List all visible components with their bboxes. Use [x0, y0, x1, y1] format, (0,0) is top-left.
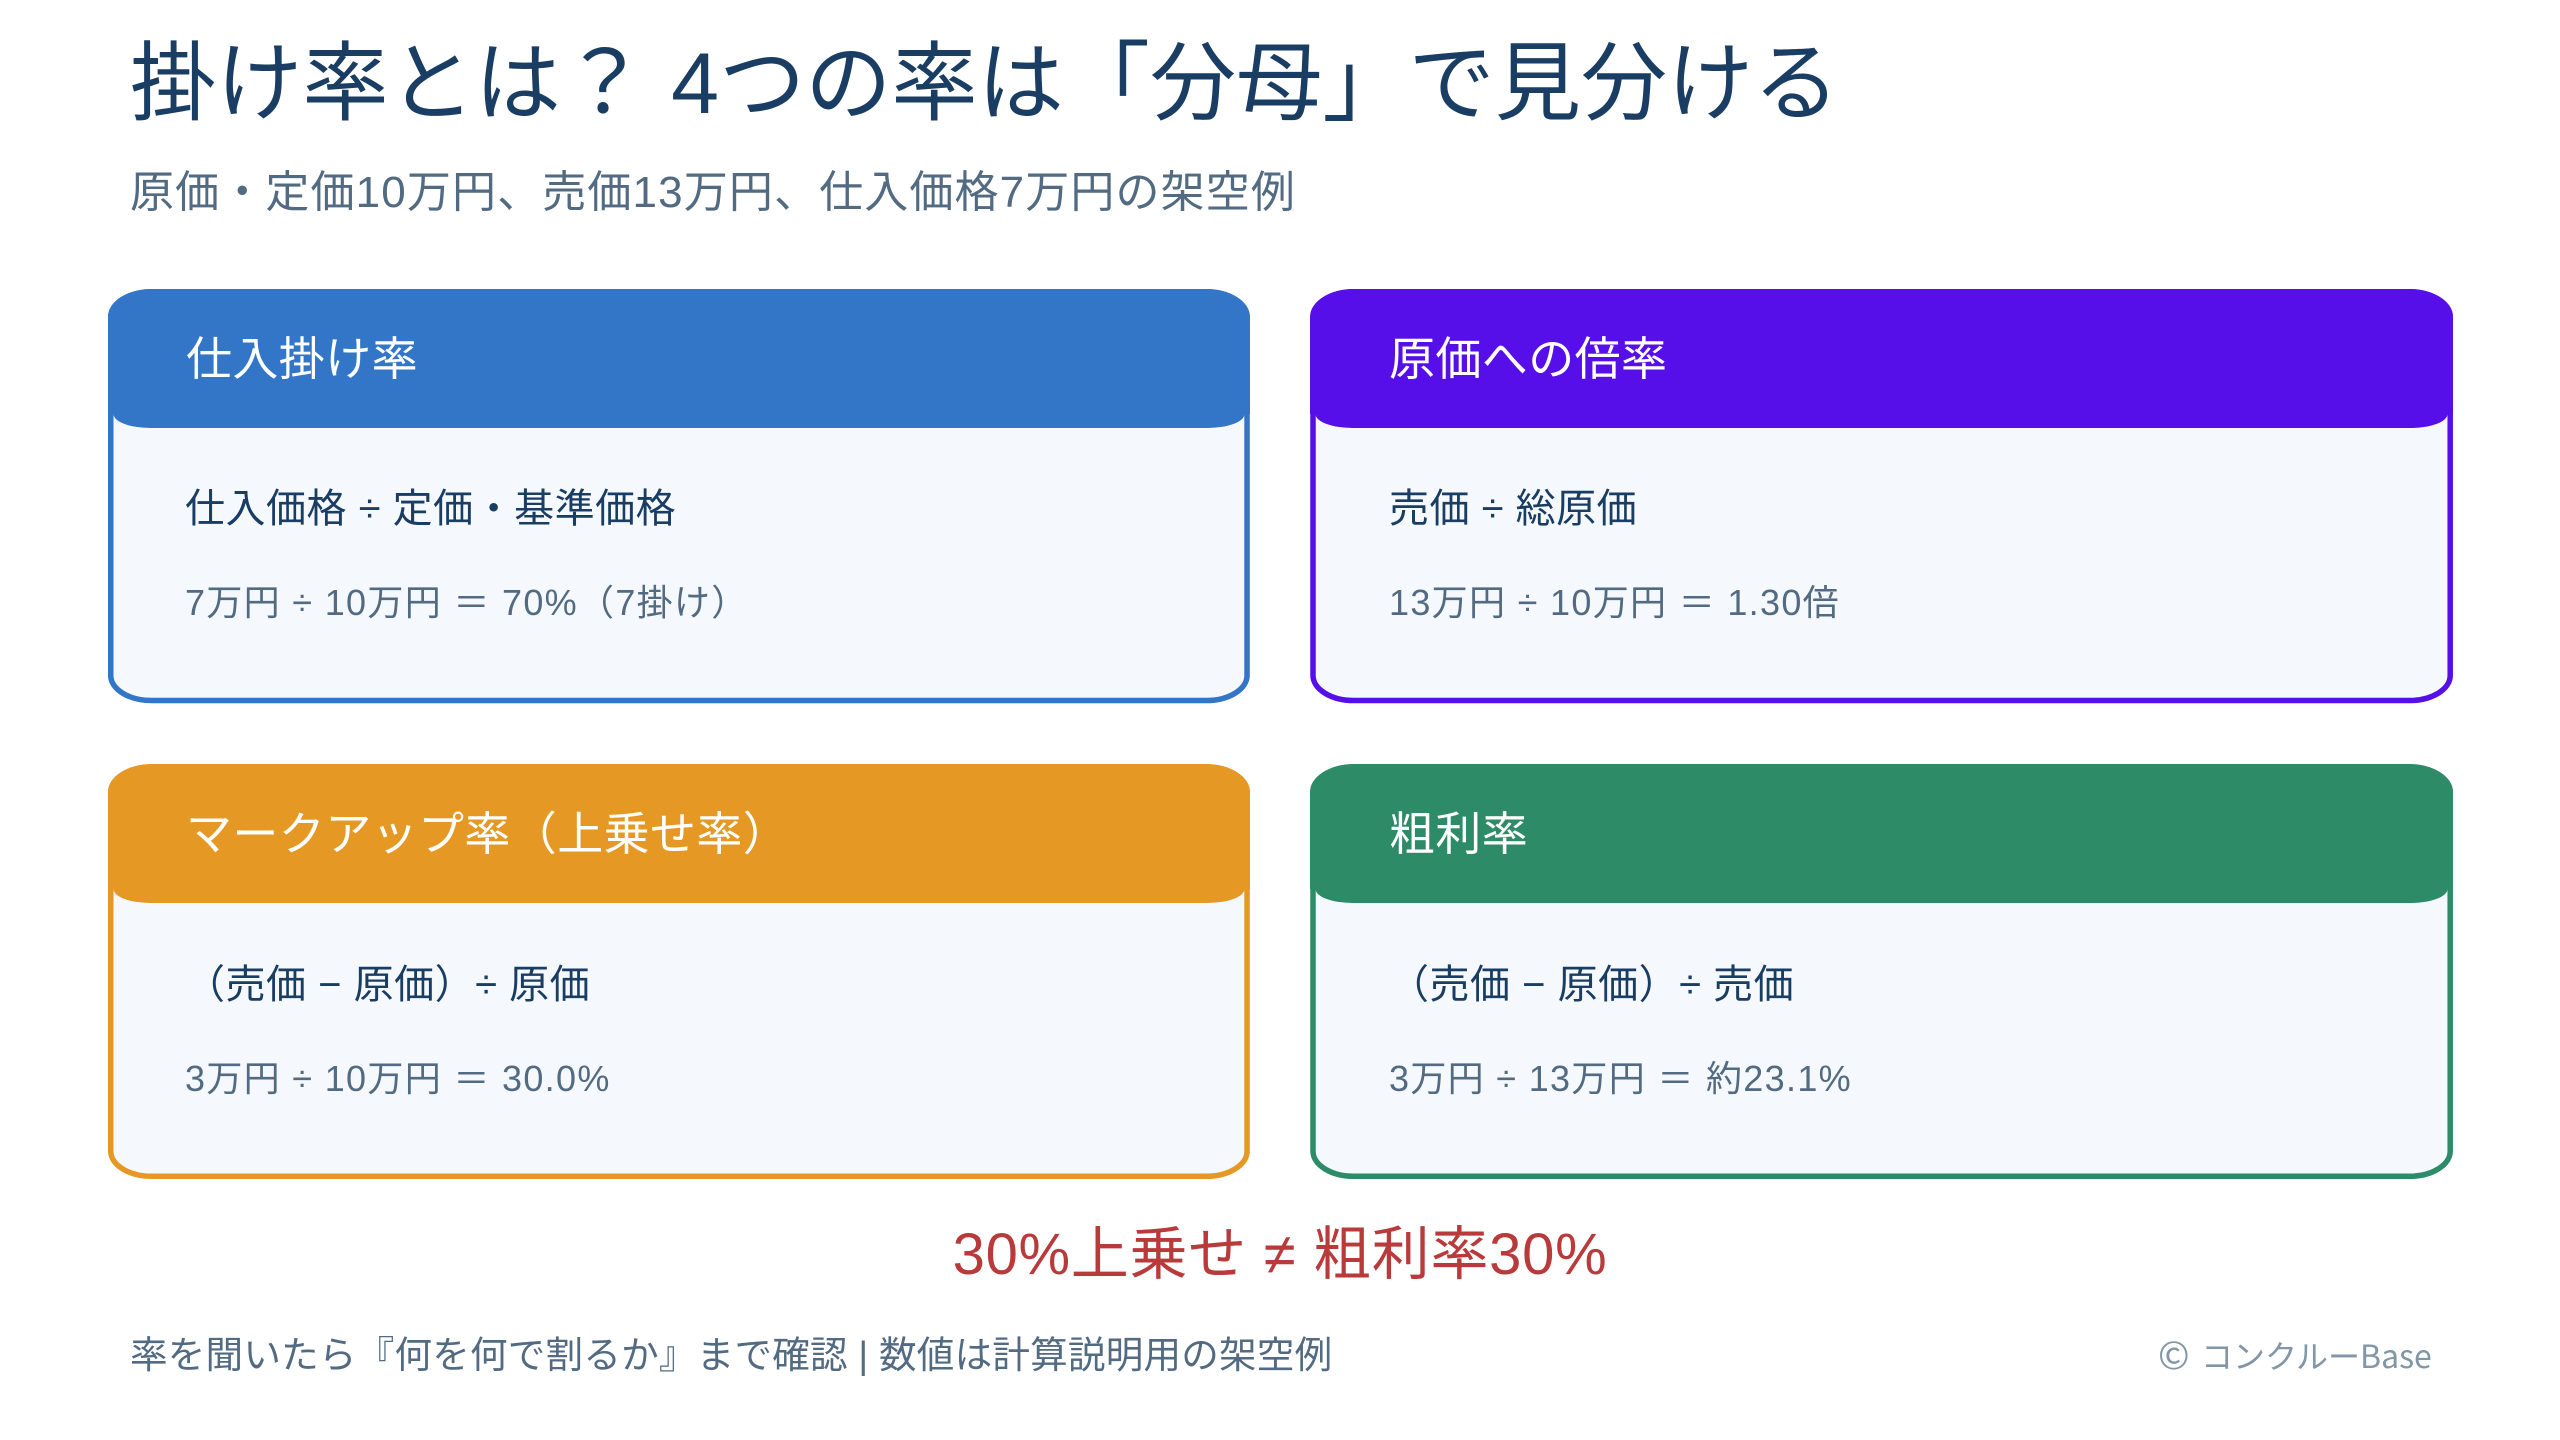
formula: 仕入価格 ÷ 定価・基準価格 [185, 487, 676, 531]
worked example: 3万円 ÷ 13万円 ＝ 約23.1% [1389, 1058, 1852, 1099]
heading: 粗利率 [1389, 808, 1528, 860]
worked example: 3万円 ÷ 10万円 ＝ 30.0% [185, 1058, 611, 1099]
title: 掛け率とは？ 4つの率は「分母」で見分ける [130, 36, 1839, 132]
panel header: 仕入掛け率 [108, 289, 1250, 428]
copyright: コンクルーBase [2201, 1332, 2432, 1378]
panel header: マークアップ率 [108, 764, 1250, 903]
panel: 原価への倍率 [1310, 289, 2453, 701]
formula: 売価 ÷ 総原価 [1389, 487, 1637, 531]
copyright: © [2158, 1325, 2190, 1380]
formula: （売価 − 原価）÷ 売価 [1389, 963, 1794, 1007]
worked example: 7万円 ÷ 10万円 ＝ 70%（7掛け） [185, 582, 749, 623]
callout: 30%上乗せ ≠ 粗利率30% [953, 1222, 1607, 1287]
panel header: 粗利率 [1310, 764, 2453, 903]
subtitle: 原価・定価10万円、売価13万円、仕入価格7万円の架空例 [130, 168, 1296, 217]
footer note: 率を聞いたら『何を何で割るか』まで確認 | 数値は計算説明用の架空例 [130, 1334, 1332, 1376]
panel: マークアップ率 [108, 764, 1250, 1176]
worked example: 13万円 ÷ 10万円 ＝ 1.30倍 [1389, 582, 1840, 623]
heading: マークアップ率（上乗せ率） [186, 808, 789, 860]
panel: 仕入掛け率 [108, 289, 1250, 701]
panel: 粗利率 [1310, 764, 2453, 1176]
heading: 原価への倍率 [1389, 333, 1667, 385]
formula: （売価 − 原価）÷ 原価 [185, 963, 590, 1007]
panel header: 原価への倍率 [1310, 289, 2453, 428]
heading: 仕入掛け率 [186, 333, 418, 385]
